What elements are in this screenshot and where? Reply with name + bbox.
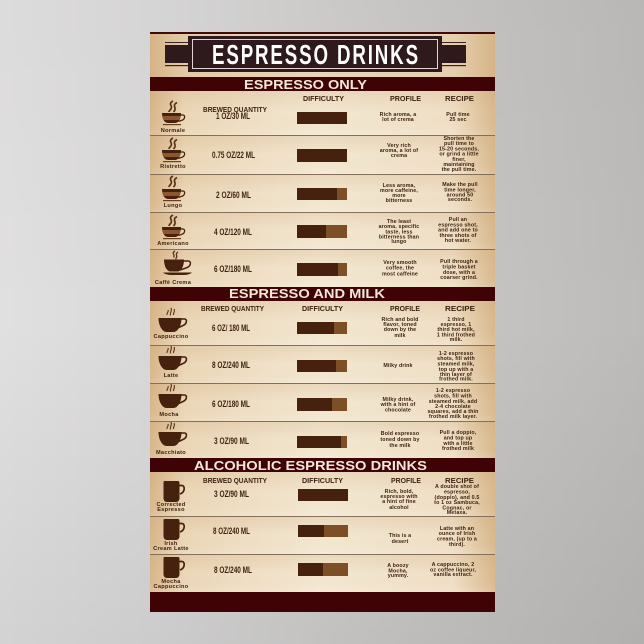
row: Mocha Cappuccino: Mocha, bbox=[388, 568, 408, 574]
icon: Ristretto cup bbox=[162, 138, 185, 162]
icon: Normale cup bbox=[162, 101, 185, 125]
row: Mocha: frothed milk layer. bbox=[429, 414, 477, 420]
row: Mocha Cappuccino: Mocha bbox=[161, 579, 181, 585]
row: Americano: Pull an bbox=[449, 217, 467, 223]
icon: Macchiato cup bbox=[158, 422, 186, 446]
section band: espresso only bbox=[150, 77, 495, 92]
row: Ristretto: or grind a little bbox=[439, 152, 479, 158]
row: Lungo: Make the pull bbox=[442, 182, 478, 188]
row: Macchiato: with a little bbox=[442, 441, 473, 447]
row: Normale bbox=[161, 101, 470, 134]
row: Mocha bbox=[158, 384, 479, 420]
title banner bbox=[150, 34, 495, 77]
row: Normale: Rich aroma, a bbox=[380, 112, 416, 118]
row: Normale: Pull time bbox=[446, 112, 470, 118]
icon: Lungo cup bbox=[162, 176, 185, 201]
icon: Caffe Crema cup bbox=[163, 251, 192, 275]
row: Mocha: squares, add a thin bbox=[427, 409, 479, 415]
row: Macchiato: frothed milk bbox=[442, 446, 474, 452]
title: ESPRESSO DRINKS bbox=[212, 39, 418, 70]
row: Cappuccino: 6 OZ/ 180 ML bbox=[212, 323, 250, 334]
row: Latte: top up with a bbox=[439, 367, 473, 373]
icon: Cappuccino cup bbox=[158, 308, 186, 332]
row: Americano: espresso shot, bbox=[438, 222, 478, 228]
row: Lungo: seconds. bbox=[448, 197, 472, 203]
icon: Americano cup bbox=[162, 215, 185, 239]
row: Corrected Espresso: Rich, bold, bbox=[385, 489, 414, 495]
row: Ristretto bbox=[160, 136, 479, 173]
row: Mocha: with a hint of bbox=[380, 402, 415, 408]
row: Caffe Crema: 6 OZ/180 ML bbox=[214, 264, 252, 275]
row: Cappuccino: milk. bbox=[450, 337, 463, 343]
row: Mocha: steamed milk, add bbox=[429, 399, 477, 405]
row: Cappuccino bbox=[153, 308, 475, 343]
column headers: espresso and milk: BREWED QUANTITY bbox=[201, 304, 264, 313]
row: Caffe Crema: coffee, the bbox=[386, 266, 414, 272]
row: Cappuccino: flavor, toned bbox=[383, 322, 417, 328]
section band: alcoholic espresso drinks: ALCOHOLIC ESPRESSO DRINKS bbox=[194, 458, 427, 473]
row: Corrected Espresso: espresso, bbox=[444, 490, 470, 496]
row: Americano: and add one to bbox=[438, 228, 478, 234]
row: Mocha Cappuccino: vanilla extract. bbox=[433, 572, 473, 578]
column headers: espresso only bbox=[203, 94, 474, 114]
row: Lungo bbox=[162, 176, 478, 209]
bottom band bbox=[150, 592, 495, 612]
row: Americano: lungo bbox=[391, 239, 407, 245]
row: Latte: shots, fill with bbox=[437, 356, 475, 362]
row: Ristretto: 15-20 seconds, bbox=[439, 146, 479, 152]
row: Americano: The least bbox=[387, 219, 411, 225]
row: Americano: three shots of bbox=[439, 233, 477, 239]
row: Caffe Crema: Very smooth bbox=[383, 260, 417, 266]
row: Irish Cream Latte: cream, (up to a bbox=[437, 536, 477, 542]
row: Caffe Crema: coarser grind. bbox=[440, 275, 478, 281]
icon: Irish Cream Latte mug bbox=[164, 519, 184, 540]
column headers: espresso and milk: DIFFICULTY bbox=[302, 304, 343, 313]
row: Lungo: Lungo bbox=[164, 203, 183, 209]
row: Mocha: Milky drink, bbox=[383, 397, 414, 403]
row: Corrected Espresso: Corrected bbox=[156, 502, 186, 508]
icon: Mocha Cappuccino mug bbox=[164, 557, 184, 578]
poster panel bbox=[150, 32, 495, 612]
column headers: alcoholic: DIFFICULTY bbox=[302, 476, 343, 485]
row: Irish Cream Latte: This is a bbox=[389, 533, 411, 539]
row: Corrected Espresso bbox=[156, 481, 480, 516]
row: Macchiato bbox=[156, 422, 477, 456]
row: Corrected Espresso: to 1 oz Sambuca, bbox=[434, 500, 480, 506]
row: Latte: Milky drink bbox=[383, 363, 413, 369]
row: Ristretto: maintaining bbox=[443, 162, 475, 168]
row: Latte: steamed milk, bbox=[438, 362, 475, 368]
row: Americano: taste, less bbox=[385, 230, 413, 236]
row: Macchiato: Bold espresso bbox=[381, 431, 420, 437]
row: Corrected Espresso: 3 OZ/90 ML bbox=[214, 489, 249, 500]
row: Mocha: Mocha bbox=[159, 412, 179, 418]
row: Macchiato: the milk bbox=[389, 443, 411, 449]
row: Americano bbox=[157, 215, 478, 247]
column headers: espresso and milk: PROFILE bbox=[390, 304, 420, 313]
row: Lungo: more caffeine, bbox=[380, 188, 418, 194]
row: Cappuccino: Cappuccino bbox=[153, 334, 189, 340]
row: Corrected Espresso: Espresso bbox=[157, 507, 185, 513]
row: Irish Cream Latte: Cream Latte bbox=[153, 546, 189, 552]
row: Ristretto: pull time to bbox=[444, 141, 475, 147]
row: Cappuccino: milk bbox=[394, 333, 406, 339]
row: Macchiato: and top up bbox=[444, 436, 473, 442]
row: Mocha Cappuccino: Cappuccino bbox=[153, 584, 189, 590]
column headers: espresso only: BREWED QUANTITY bbox=[203, 105, 267, 114]
row: Cappuccino: 1 third bbox=[447, 317, 465, 323]
row: Lungo: 2 OZ/60 ML bbox=[216, 190, 251, 201]
column headers: espresso only: RECIPE bbox=[445, 94, 474, 103]
row: Americano: Americano bbox=[157, 241, 189, 247]
row: Caffe Crema: triple basket bbox=[442, 264, 476, 270]
row: Corrected Espresso: A double shot of bbox=[435, 484, 479, 490]
row: Normale: 1 OZ/30 ML bbox=[216, 111, 250, 122]
column headers: espresso only: DIFFICULTY bbox=[303, 94, 344, 103]
row: Normale: lot of crema bbox=[382, 117, 414, 123]
row: Ristretto: the pull time. bbox=[442, 167, 477, 173]
row: Lungo: bitterness bbox=[386, 198, 412, 204]
row: Ristretto: aroma, a lot of bbox=[380, 148, 418, 154]
row: Ristretto: 0.75 OZ/22 ML bbox=[212, 150, 255, 161]
row: Normale: 25 sec bbox=[449, 117, 467, 123]
row: Mocha: chocolate bbox=[385, 408, 411, 414]
row: Lungo: around 50 bbox=[447, 192, 473, 198]
section band: alcoholic espresso drinks bbox=[150, 458, 495, 473]
row: Mocha: 6 OZ/180 ML bbox=[212, 399, 250, 410]
row: Latte: Latte bbox=[164, 373, 178, 379]
row: Latte: 1-2 espresso bbox=[439, 351, 474, 357]
row: Latte: frothed milk. bbox=[439, 376, 473, 382]
row: Irish Cream Latte bbox=[153, 519, 477, 552]
column headers: alcoholic: RECIPE bbox=[445, 476, 474, 485]
row: Lungo: Less aroma, bbox=[383, 183, 416, 189]
row: Irish Cream Latte: Latte with an bbox=[440, 526, 474, 532]
row: Macchiato: toned down by bbox=[380, 437, 420, 443]
row: Irish Cream Latte: ounce of Irish bbox=[439, 531, 475, 537]
row: Mocha: shots, fill with bbox=[434, 394, 472, 400]
row: Cappuccino: third hot milk, bbox=[437, 327, 475, 333]
row: Irish Cream Latte: third). bbox=[449, 542, 465, 548]
section band: espresso and milk bbox=[150, 286, 495, 301]
row: Lungo: more bbox=[392, 193, 406, 199]
row: Ristretto: Shorten the bbox=[443, 136, 475, 142]
row: Mocha Cappuccino: A boozy bbox=[387, 563, 409, 569]
row: Corrected Espresso: Cognac, or bbox=[442, 506, 472, 512]
icon: Latte cup bbox=[158, 346, 186, 370]
row: Ristretto: Ristretto bbox=[160, 164, 186, 170]
column headers: espresso and milk: RECIPE bbox=[445, 304, 475, 313]
row: Corrected Espresso: espresso with bbox=[380, 494, 418, 500]
row: Cappuccino: Rich and bold bbox=[382, 317, 418, 323]
row: Normale: Normale bbox=[161, 128, 185, 134]
row: Cappuccino: down by the bbox=[384, 327, 416, 333]
column headers: espresso and milk bbox=[201, 304, 475, 313]
row: Macchiato: Pull a doppio, bbox=[440, 430, 477, 436]
row: Latte: thin layer of bbox=[440, 372, 472, 378]
row: Irish Cream Latte: desert bbox=[392, 539, 408, 545]
row: Macchiato: 3 OZ/90 ML bbox=[214, 436, 249, 447]
icon: Mocha cup bbox=[158, 384, 186, 408]
row: Latte bbox=[158, 346, 475, 382]
row: Mocha: 1-2 espresso bbox=[436, 388, 471, 394]
row: Corrected Espresso: Metaxa. bbox=[447, 510, 468, 516]
row shading bbox=[150, 91, 495, 592]
row: Corrected Espresso: a hint of fine bbox=[382, 499, 416, 505]
row: Corrected Espresso: (doppio), and 0.5 bbox=[435, 495, 479, 501]
row: Mocha Cappuccino bbox=[153, 557, 476, 590]
row: Latte: 8 OZ/240 ML bbox=[212, 360, 250, 371]
row: Mocha: 2-4 chocolate bbox=[435, 404, 471, 410]
row: Lungo: time longer, bbox=[444, 188, 476, 194]
row: Cappuccino: espresso, 1 bbox=[441, 322, 471, 328]
column headers: espresso only: PROFILE bbox=[390, 94, 421, 103]
icon: Corrected Espresso mug bbox=[164, 481, 184, 502]
row: Irish Cream Latte: 8 OZ/240 ML bbox=[213, 526, 250, 537]
column headers: alcoholic: PROFILE bbox=[391, 476, 421, 485]
row: Caffe Crema bbox=[155, 251, 478, 286]
section band: espresso only: ESPRESSO ONLY bbox=[244, 77, 367, 92]
row: Americano: hot water. bbox=[445, 238, 471, 244]
row: Mocha Cappuccino: oz coffee liqueur, bbox=[430, 568, 476, 574]
column headers: alcoholic: BREWED QUANTITY bbox=[203, 476, 267, 485]
section band: espresso and milk: ESPRESSO AND MILK bbox=[229, 286, 386, 301]
row: Caffe Crema: dose, with a bbox=[443, 270, 475, 276]
column headers: alcoholic bbox=[203, 476, 474, 485]
row: Mocha Cappuccino: A cappuccino, 2 bbox=[432, 562, 474, 568]
row: Macchiato: Macchiato bbox=[156, 450, 186, 456]
row: Caffe Crema: most caffeine bbox=[382, 272, 418, 278]
row: Americano: aroma, specific bbox=[379, 224, 419, 230]
row: Ristretto: crema bbox=[391, 153, 407, 159]
row: Ristretto: Very rich bbox=[387, 143, 411, 149]
row: Ristretto: finer, bbox=[452, 157, 466, 163]
row: Mocha Cappuccino: 8 OZ/240 ML bbox=[214, 565, 252, 576]
row: Corrected Espresso: alcohol bbox=[389, 505, 409, 511]
row: Americano: 4 OZ/120 ML bbox=[214, 227, 252, 238]
row: Mocha Cappuccino: yummy. bbox=[388, 573, 409, 579]
row: Americano: bitterness than bbox=[379, 234, 419, 240]
row: Irish Cream Latte: Irish bbox=[164, 541, 178, 547]
row: Cappuccino: 1 third frothed bbox=[437, 332, 475, 338]
row: Caffe Crema: Pull through a bbox=[440, 259, 478, 265]
row: Caffe Crema: Caffè Crema bbox=[155, 280, 192, 286]
